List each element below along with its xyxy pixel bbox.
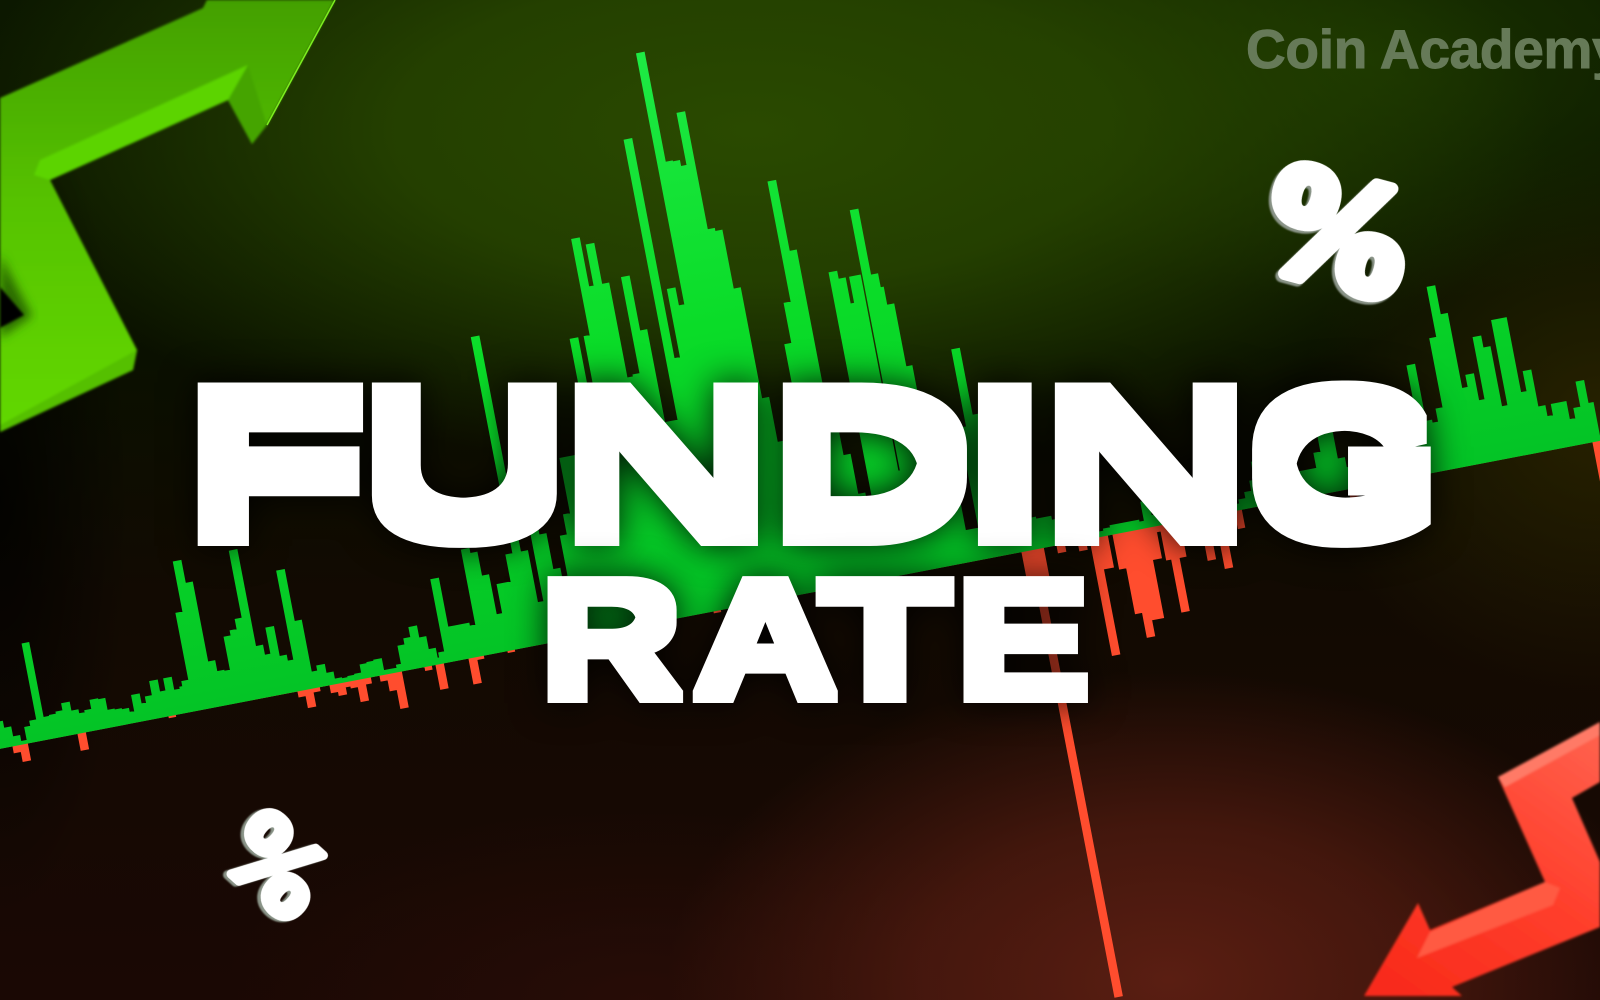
title: FUNDING: D	[766, 354, 976, 574]
title: FUNDING: N	[558, 354, 775, 574]
icon: red falling arrow	[1364, 722, 1600, 996]
negative funding bars	[0, 440, 1600, 1000]
title: FUNDING	[180, 354, 1444, 574]
title: FUNDING: U	[357, 354, 572, 574]
icon: small percent sign: %	[200, 789, 352, 943]
icon: large percent sign: %	[1245, 134, 1429, 335]
title: RATE: E	[956, 547, 1090, 733]
title: FUNDING: N	[1038, 354, 1254, 574]
title: RATE: R	[540, 547, 681, 733]
title: RATE	[540, 547, 1090, 733]
title: FUNDING: F	[180, 354, 372, 574]
title: FUNDING: G	[1245, 354, 1444, 574]
positive funding bars	[0, 0, 1600, 748]
title: FUNDING: I	[959, 354, 1051, 574]
icon: green rising arrow	[0, 0, 335, 432]
title: RATE: A	[694, 547, 837, 733]
title: RATE: T	[819, 547, 951, 733]
